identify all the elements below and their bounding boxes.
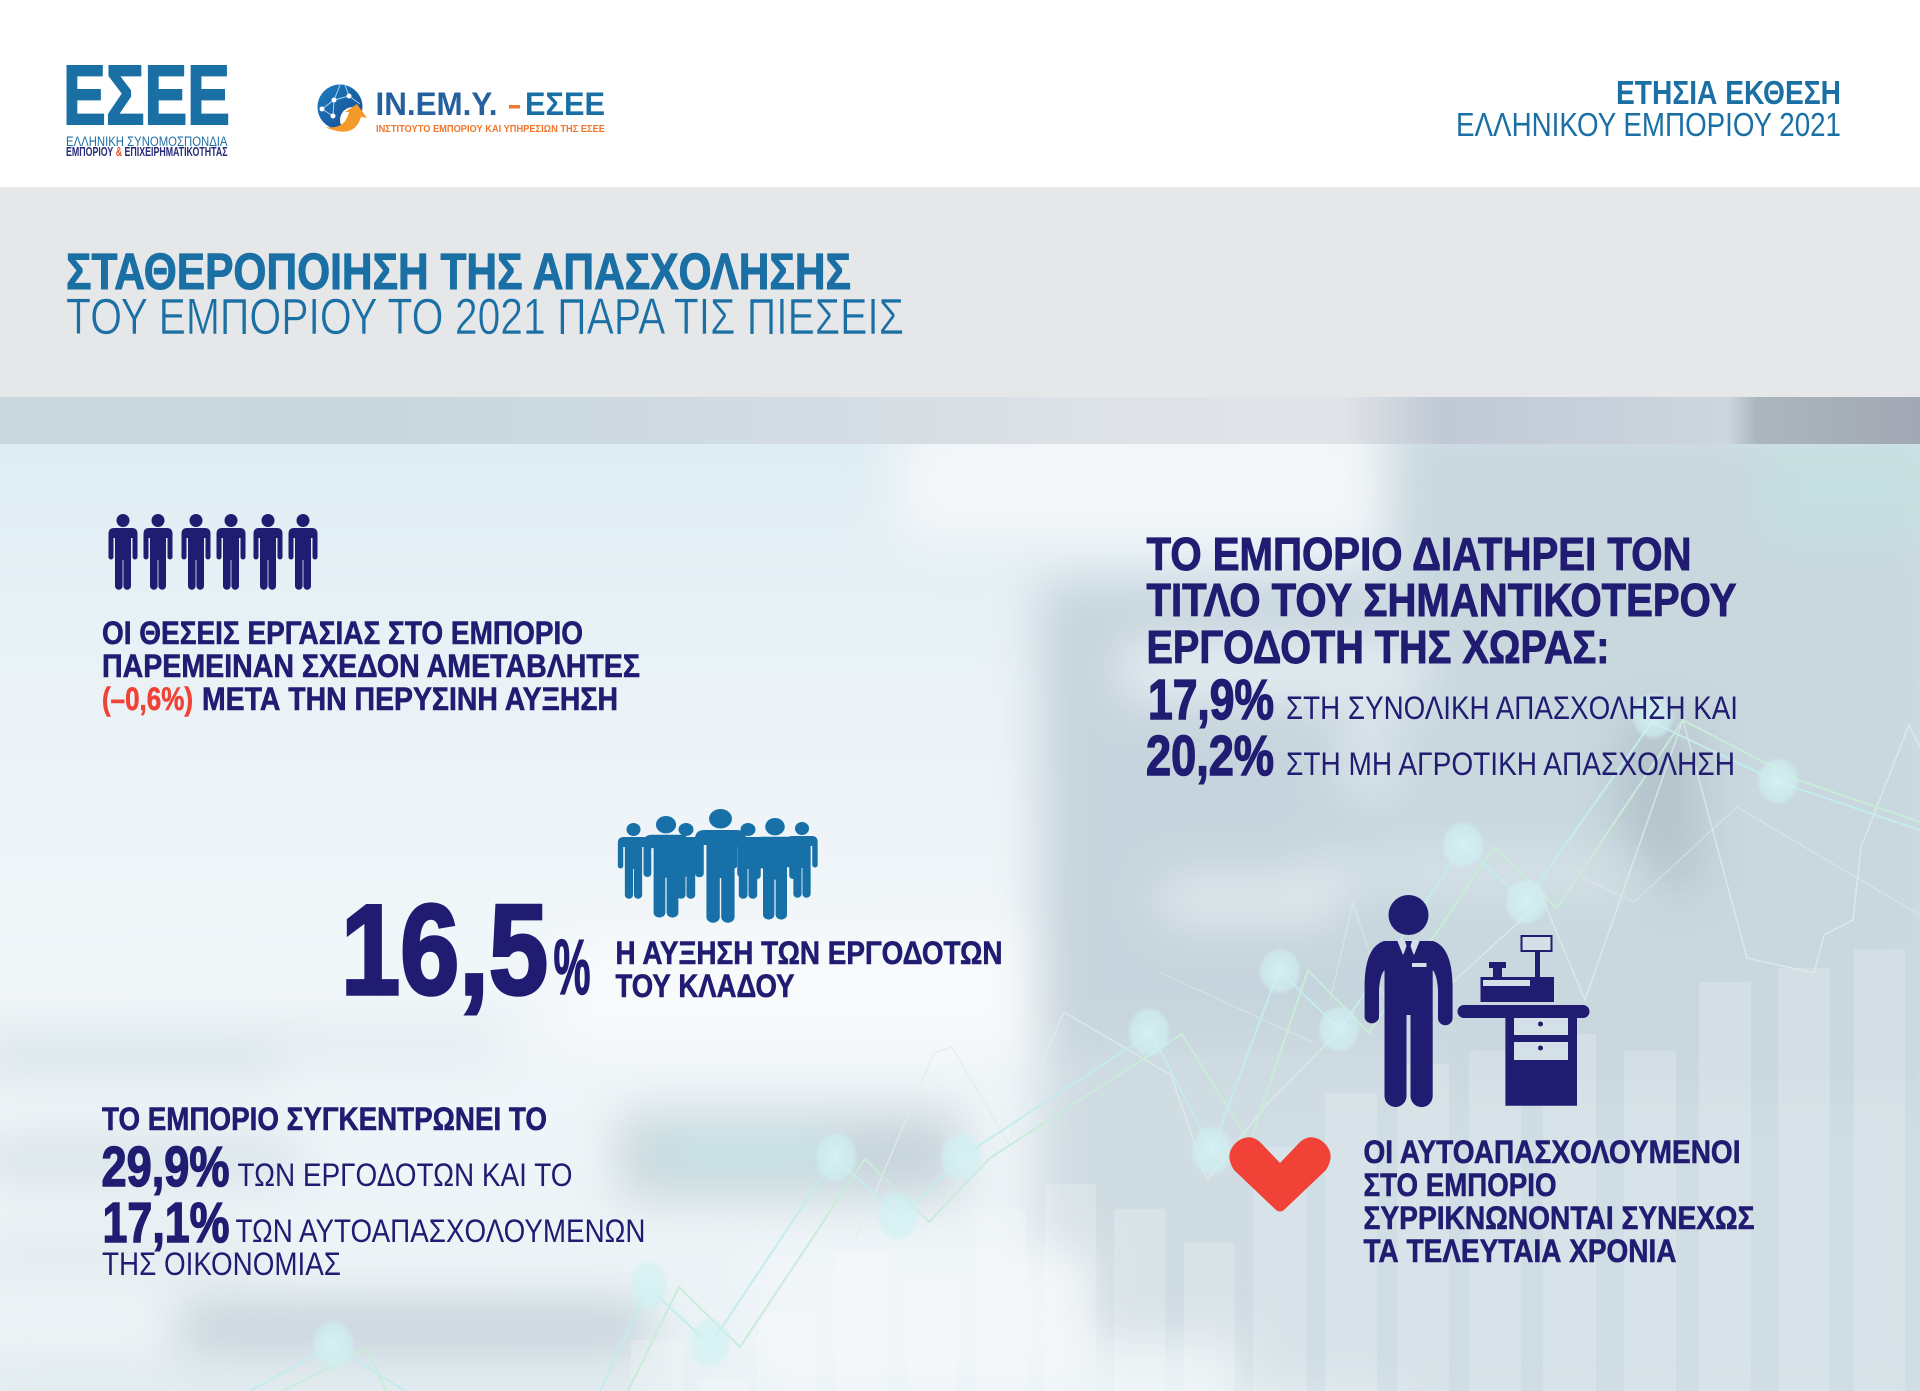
icon: six workers bbox=[108, 514, 318, 590]
chart bars bbox=[631, 949, 1905, 1391]
text: jobs nearly unchanged bbox=[102, 615, 640, 717]
tinted strip under title band bbox=[0, 397, 1920, 444]
text: self-employed shrinking bbox=[1364, 1134, 1754, 1269]
icon: group of employers bbox=[618, 809, 818, 923]
text: trade concentrates employers and self-employed: ΤΩΝ ΕΡΓΟΔΟΤΩΝ ΚΑΙ ΤΟ bbox=[238, 1157, 572, 1193]
icon: shopkeeper at cash register bbox=[1365, 895, 1590, 1107]
text: jobs nearly unchanged: ΟΙ ΘΕΣΕΙΣ ΕΡΓΑΣΙΑΣ ΣΤΟ ΕΜΠΟΡΙΟ bbox=[102, 615, 583, 651]
logo: ESEE bbox=[63, 48, 230, 159]
logo: ESEE: ΕΣΕΕ bbox=[63, 48, 230, 142]
text: self-employed shrinking: ΤΑ ΤΕΛΕΥΤΑΙΑ ΧΡΟΝΙΑ bbox=[1364, 1233, 1676, 1269]
stat: 16,5%: 16,5 bbox=[341, 879, 548, 1022]
logo: INEMY: IN.EM.Y. bbox=[376, 86, 498, 122]
icon: globe with arrow bbox=[318, 84, 367, 133]
report label: ΕΤΗΣΙΑ ΕΚΘΕΣΗ bbox=[1616, 74, 1841, 111]
text: largest employer in the country: ΤΙΤΛΟ ΤΟΥ ΣΗΜΑΝΤΙΚΟΤΕΡΟΥ bbox=[1146, 574, 1736, 626]
text: jobs nearly unchanged: (–0,6%) bbox=[102, 681, 193, 717]
blurred photo background bbox=[0, 420, 1920, 1391]
report label: ΕΛΛΗΝΙΚΟΥ ΕΜΠΟΡΙΟΥ 2021 bbox=[1456, 106, 1841, 143]
text: employers increase: Η ΑΥΞΗΣΗ ΤΩΝ ΕΡΓΟΔΟΤΩΝ bbox=[616, 935, 1002, 971]
text: trade concentrates employers and self-employed: 29,9% bbox=[102, 1135, 230, 1199]
text: employers increase bbox=[616, 935, 1002, 1004]
title: ΣΤΑΘΕΡΟΠΟΙΗΣΗ ΤΗΣ ΑΠΑΣΧΟΛΗΣΗΣ bbox=[66, 243, 851, 300]
logo: INEMY bbox=[318, 84, 605, 135]
text: largest employer in the country: 17,9% bbox=[1148, 668, 1274, 732]
logo: INEMY: ΕΣΕΕ bbox=[525, 86, 605, 122]
icon: red heart bbox=[1229, 1137, 1331, 1212]
text: self-employed shrinking: ΣΥΡΡΙΚΝΩΝΟΝΤΑΙ ΣΥΝΕΧΩΣ bbox=[1364, 1200, 1754, 1236]
text: largest employer in the country: ΕΡΓΟΔΟΤΗ ΤΗΣ ΧΩΡΑΣ: bbox=[1146, 621, 1610, 673]
text: employers increase: ΤΟΥ ΚΛΑΔΟΥ bbox=[616, 968, 794, 1004]
grey title band bbox=[0, 187, 1920, 397]
shopkeeper bbox=[1365, 895, 1453, 1107]
counter bbox=[1458, 1005, 1590, 1106]
logo: INEMY: ΙΝΣΤΙΤΟΥΤΟ ΕΜΠΟΡΙΟΥ ΚΑΙ ΥΠΗΡΕΣΙΩΝ ΤΗΣ ΕΣΕΕ bbox=[376, 123, 605, 135]
text: largest employer in the country bbox=[1146, 528, 1738, 788]
text: jobs nearly unchanged: ΠΑΡΕΜΕΙΝΑΝ ΣΧΕΔΟΝ ΑΜΕΤΑΒΛΗΤΕΣ bbox=[102, 648, 640, 684]
text: trade concentrates employers and self-employed: ΤΗΣ ΟΙΚΟΝΟΜΙΑΣ bbox=[102, 1246, 341, 1282]
text: trade concentrates employers and self-employed bbox=[102, 1101, 646, 1282]
text: largest employer in the country: ΣΤΗ ΣΥΝΟΛΙΚΗ ΑΠΑΣΧΟΛΗΣΗ ΚΑΙ bbox=[1286, 690, 1738, 726]
text: self-employed shrinking: ΣΤΟ ΕΜΠΟΡΙΟ bbox=[1364, 1167, 1556, 1203]
text: trade concentrates employers and self-employed: ΤΩΝ ΑΥΤΟΑΠΑΣΧΟΛΟΥΜΕΝΩΝ bbox=[236, 1213, 646, 1249]
text: largest employer in the country: 20,2% bbox=[1146, 724, 1274, 788]
cash register bbox=[1480, 936, 1554, 1002]
text: largest employer in the country: ΣΤΗ ΜΗ ΑΓΡΟΤΙΚΗ ΑΠΑΣΧΟΛΗΣΗ bbox=[1286, 746, 1735, 782]
text: trade concentrates employers and self-employed: 17,1% bbox=[102, 1191, 230, 1255]
report label bbox=[1456, 74, 1841, 143]
title: ΤΟΥ ΕΜΠΟΡΙΟΥ ΤΟ 2021 ΠΑΡΑ ΤΙΣ ΠΙΕΣΕΙΣ bbox=[66, 288, 904, 345]
text: trade concentrates employers and self-employed: ΤΟ ΕΜΠΟΡΙΟ ΣΥΓΚΕΝΤΡΩΝΕΙ ΤΟ bbox=[102, 1101, 547, 1137]
text: jobs nearly unchanged: ΜΕΤΑ ΤΗΝ ΠΕΡΥΣΙΝΗ ΑΥΞΗΣΗ bbox=[202, 681, 618, 717]
logo: ESEE: ΕΛΛΗΝΙΚΗ ΣΥΝΟΜΟΣΠΟΝΔΙΑ bbox=[66, 134, 228, 149]
chart lines bbox=[250, 720, 1920, 1391]
title bbox=[66, 243, 904, 345]
logo: ESEE: ΕΜΠΟΡΙΟΥ & ΕΠΙΧΕΙΡΗΜΑΤΙΚΟΤΗΤΑΣ bbox=[66, 145, 228, 159]
text: self-employed shrinking: ΟΙ ΑΥΤΟΑΠΑΣΧΟΛΟΥΜΕΝΟΙ bbox=[1364, 1134, 1740, 1170]
stat: 16,5%: % bbox=[554, 923, 590, 1011]
text: largest employer in the country: ΤΟ ΕΜΠΟΡΙΟ ΔΙΑΤΗΡΕΙ ΤΟΝ bbox=[1146, 528, 1692, 580]
